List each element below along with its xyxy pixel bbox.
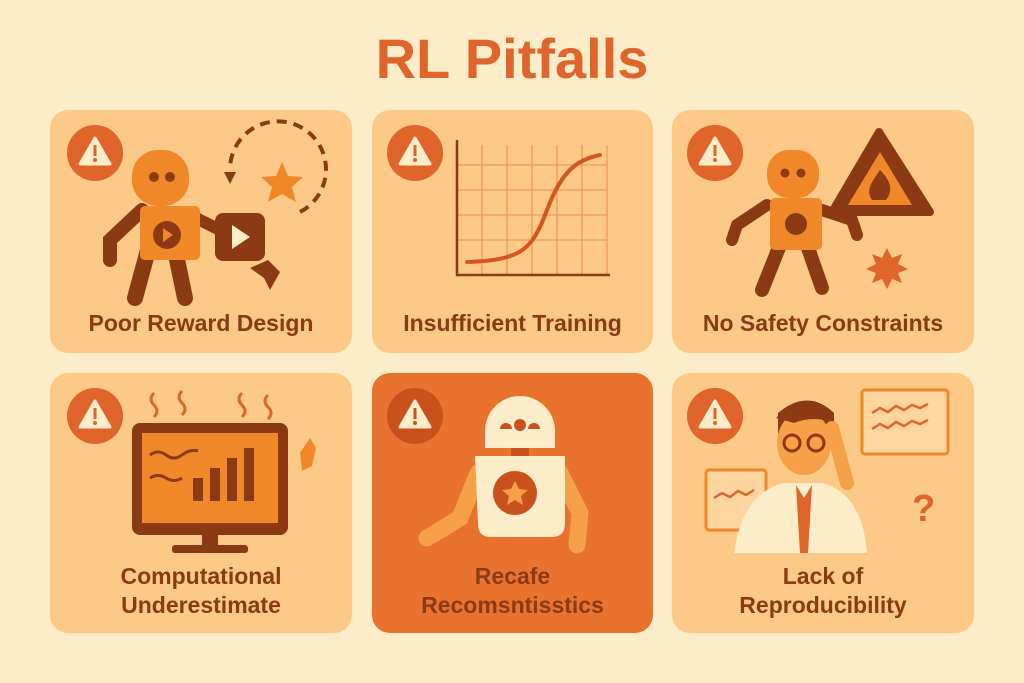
panel: no safety constraints [672, 110, 974, 353]
icon: warning [687, 388, 743, 444]
icon: warning [387, 125, 443, 181]
panel: recafe [372, 373, 653, 633]
label: Recafe [475, 563, 550, 589]
robot [732, 150, 857, 290]
robot [110, 121, 326, 298]
icon: warning [687, 125, 743, 181]
panel: insufficient training [372, 110, 653, 353]
label [739, 563, 907, 618]
icon: monitor [132, 391, 316, 553]
label: Recomsntisstics [421, 592, 604, 618]
label: Underestimate [121, 592, 281, 618]
robot [427, 396, 580, 545]
person [734, 400, 935, 553]
label [421, 563, 604, 618]
label: Lack of [783, 563, 863, 589]
icon: warning [67, 125, 123, 181]
label: Poor Reward Design [89, 310, 313, 336]
person: ? [912, 488, 935, 530]
panel: computational underestimate [50, 373, 352, 633]
panel: poor reward design [50, 110, 352, 353]
label: Reproducibility [739, 592, 907, 618]
label: Insufficient Training [403, 310, 622, 336]
charts [706, 390, 948, 530]
label [120, 563, 282, 618]
icon: warning [67, 388, 123, 444]
icon: burst [866, 248, 908, 289]
title: RL Pitfalls [376, 27, 648, 90]
icon: warning [387, 388, 443, 444]
chart [457, 140, 610, 275]
panel: lack of reproducibility [672, 373, 974, 633]
label: No Safety Constraints [703, 310, 943, 336]
icon: fire warning [832, 132, 930, 212]
label: Computational [120, 563, 282, 589]
